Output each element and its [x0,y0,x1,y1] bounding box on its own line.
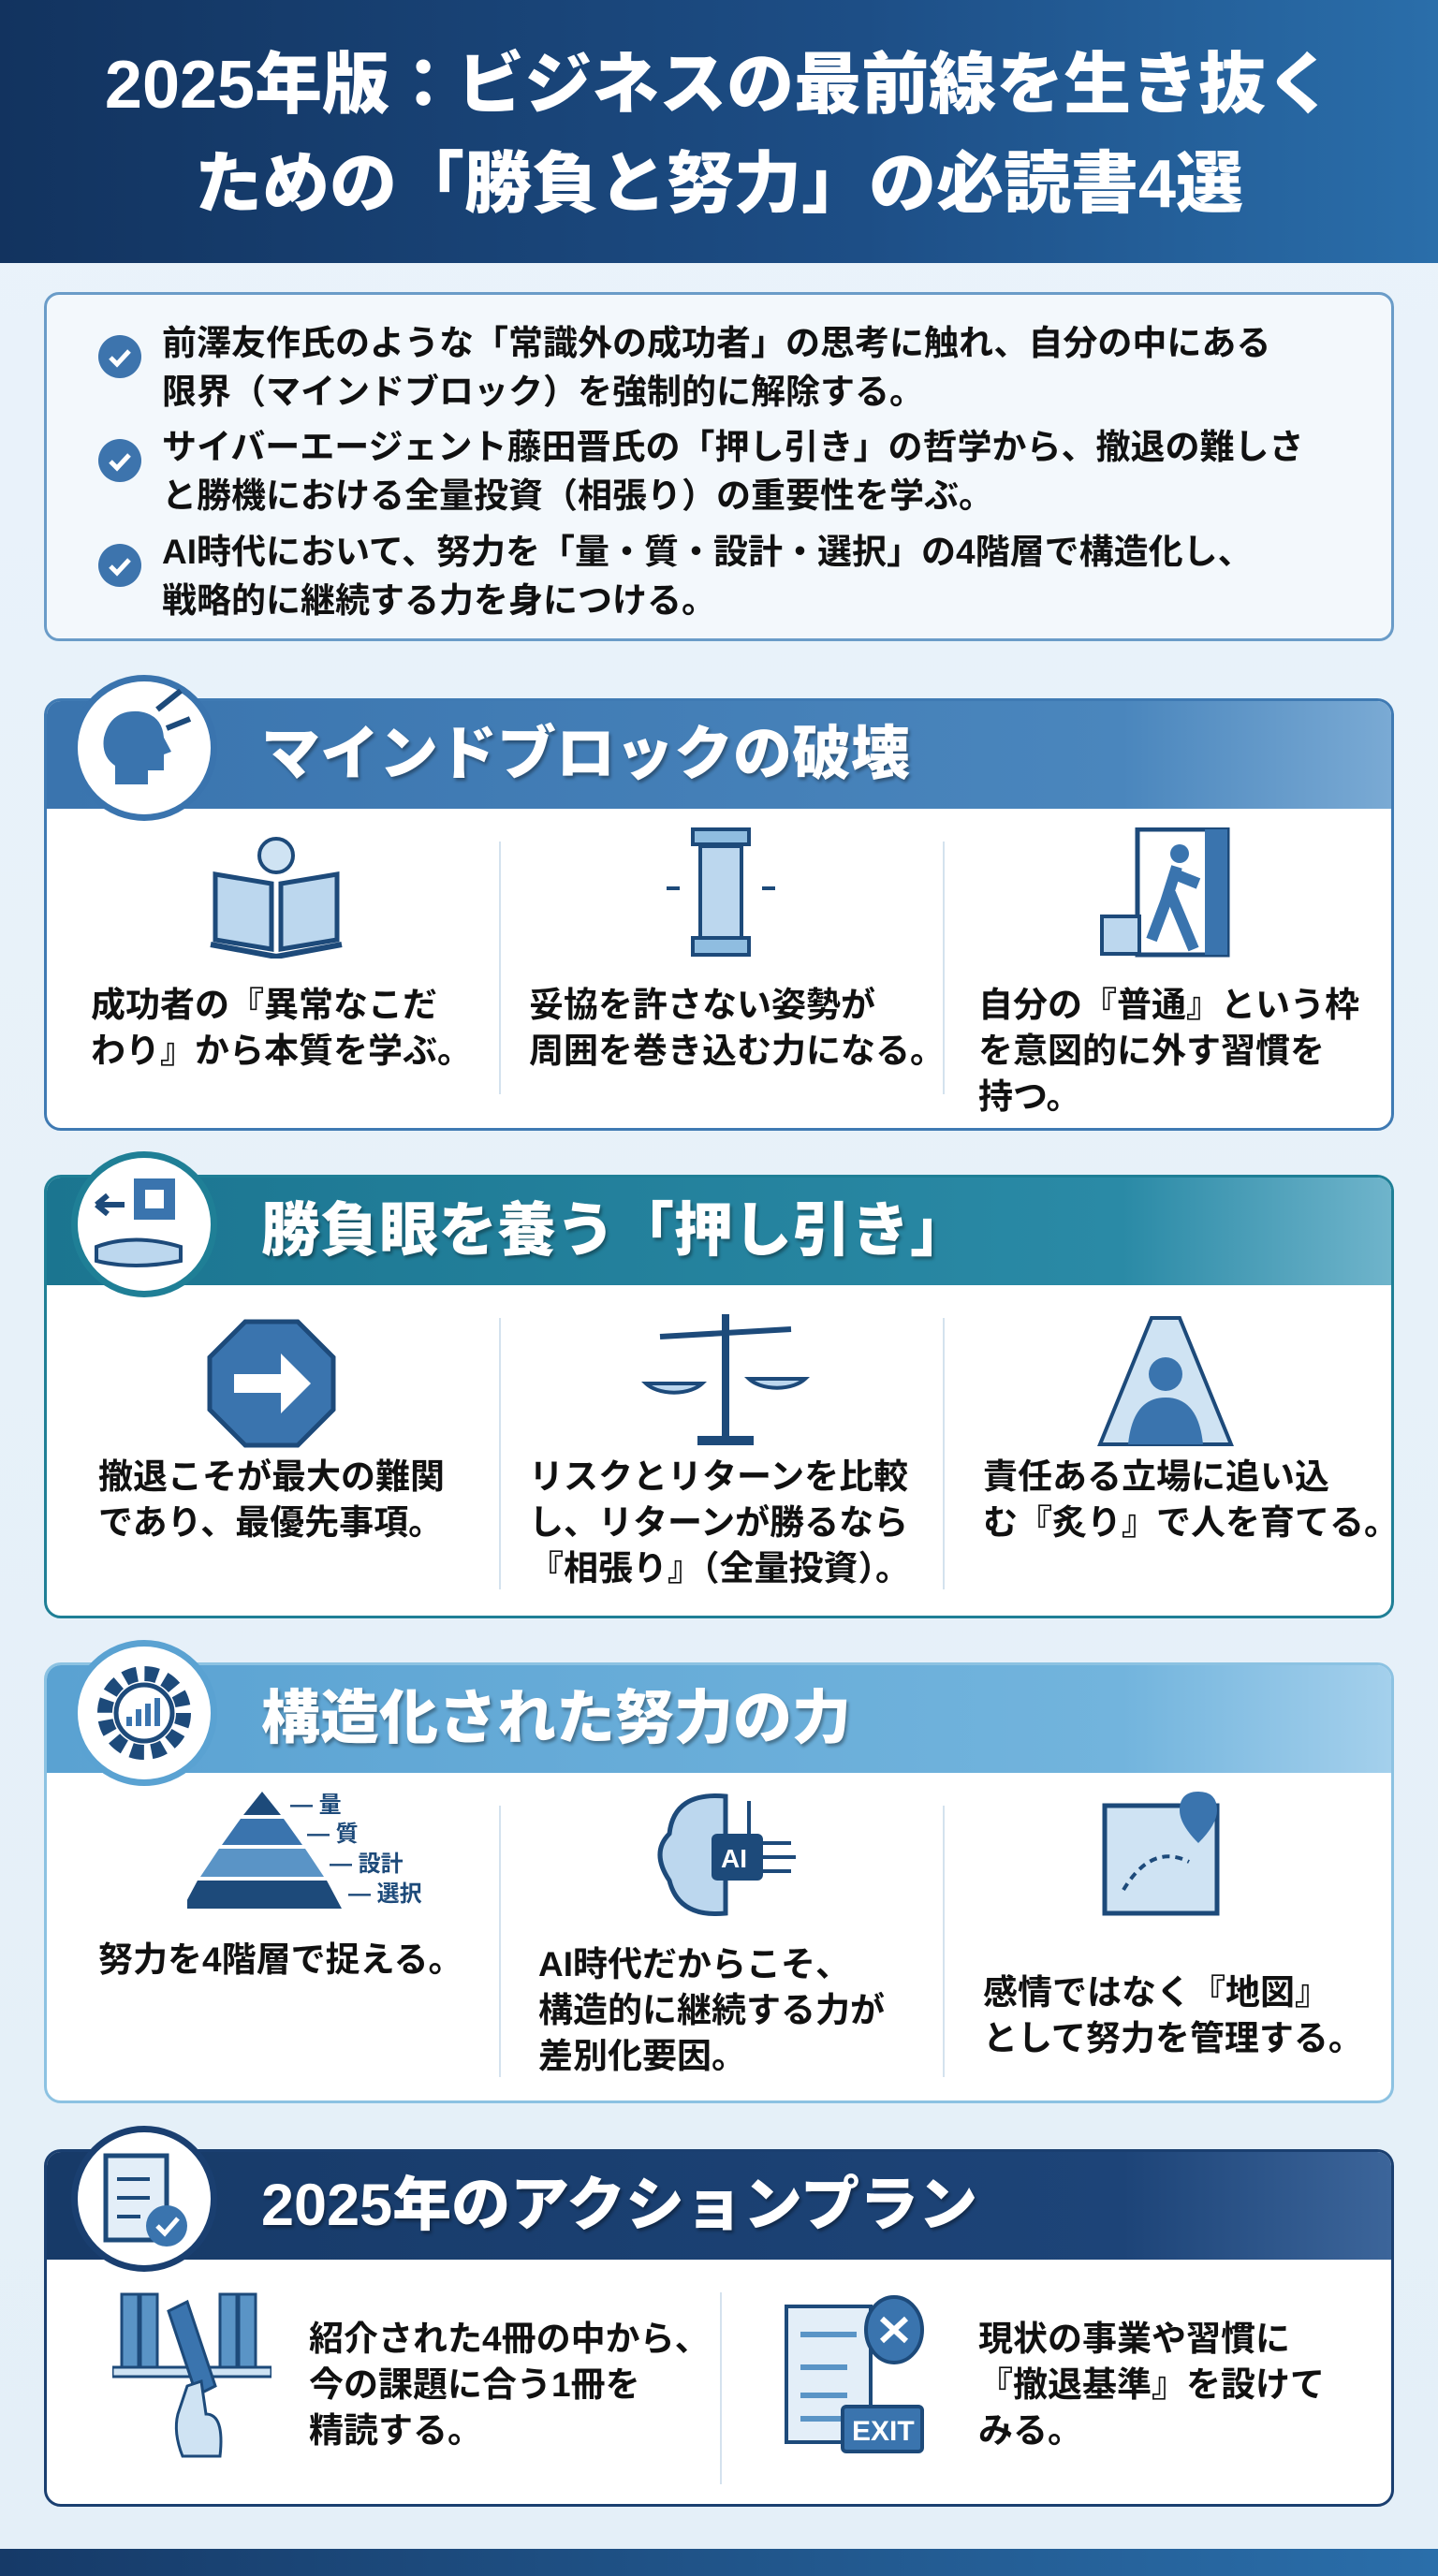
text col 2: 周囲を巻き込む力になる。 [529,1032,945,1070]
icon: AI brain: AI [721,1844,747,1873]
icon: pyramid: — 質 [307,1822,359,1847]
header: 2025年のアクションプラン [261,2173,977,2238]
icon: spotlight person [1097,1316,1234,1446]
icon: book with bulb [210,837,343,959]
header [47,1178,1391,1285]
summary box: 限界（マインドブロック）を強制的に解除する。 [162,373,924,411]
text col 1: わり』から本質を学ぶ。 [91,1032,472,1070]
panel: mind block [44,698,1394,1131]
header [47,701,1391,809]
summary box [44,292,1394,641]
text col 1: 成功者の『異常なこだ [91,986,437,1024]
panel: structured effort [44,1662,1394,2103]
text col 3 [983,1973,1363,2057]
point 2 [98,428,1304,515]
icon: scale [641,1314,810,1445]
title: 2025年版：ビジネスの最前線を生き抜く [105,48,1333,123]
text col 3: む『炙り』で人を育てる。 [983,1503,1394,1542]
icon: exit door [1100,827,1230,957]
text col 2 [538,1945,885,2075]
point 3 [98,533,1253,620]
summary box: と勝機における全量投資（相張り）の重要性を学ぶ。 [162,476,993,515]
text col 1 [98,1457,445,1542]
footer bar [0,2549,1438,2576]
summary box: 戦略的に継続する力を身につける。 [162,581,716,620]
summary box: AI時代において、努力を「量・質・設計・選択」の4階層で構造化し、 [162,533,1253,571]
text col 1: 撤退こそが最大の難関 [98,1457,445,1496]
icon circle: mind [71,675,217,821]
text col 2: 構造的に継続する力が [538,1991,885,2029]
icon: map [1103,1792,1219,1915]
summary box: サイバーエージェント藤田晋氏の「押し引き」の哲学から、撤退の難しさ [162,428,1304,466]
text col 2: 妥協を許さない姿勢が [529,986,875,1024]
text col 1 [91,986,472,1070]
text col 1: 努力を4階層で捉える。 [98,1940,462,1979]
icon: pyramid: — 量 [290,1793,342,1818]
icon: exit document [785,2295,924,2453]
text col 2: 差別化要因。 [538,2037,746,2075]
text col 2 [529,986,945,1070]
text col 3: 自分の『普通』という枠 [978,986,1359,1024]
text col 2: リスクとリターンを比較 [529,1457,908,1496]
text col 2: 現状の事業や習慣に [978,2320,1290,2358]
text col 1: 精読する。 [309,2411,482,2450]
icon circle: hand [71,1151,217,1297]
icon: exit document: EXIT [852,2416,915,2447]
icon circle: clipboard [71,2126,217,2272]
header [47,2152,1391,2260]
icon: pyramid [187,1792,422,1909]
summary box: 前澤友作氏のような「常識外の成功者」の思考に触れ、自分の中にある [162,324,1270,362]
title: ための「勝負と努力」の必読書4選 [195,147,1243,222]
text col 2 [529,1457,910,1588]
icon circle: gear [71,1640,217,1786]
text col 1: であり、最優先事項。 [98,1503,443,1542]
icon: pyramid: — 選択 [348,1881,422,1907]
panel: push and pull [44,1175,1394,1618]
text col 1: 紹介された4冊の中から、 [309,2320,710,2358]
text col 3: を意図的に外す習慣を [978,1032,1325,1070]
text col 2: AI時代だからこそ、 [538,1945,850,1983]
text col 2: し、リターンが勝るなら [529,1503,908,1542]
header [47,1665,1391,1773]
point 1 [98,324,1270,411]
text col 2: 『撤退基準』を設けて [978,2365,1325,2404]
text col 3: 感情ではなく『地図』 [983,1973,1329,2012]
icon: pyramid: — 設計 [330,1852,404,1877]
icon: arrow sign [208,1320,335,1447]
header: 構造化された努力の力 [261,1686,851,1751]
header: マインドブロックの破壊 [261,722,910,787]
icon: AI brain [657,1793,796,1916]
title [0,0,1438,263]
text col 1 [309,2320,710,2450]
text col 3 [983,1457,1394,1542]
icon: pillar [667,827,775,957]
text col 3: 持つ。 [978,1077,1081,1116]
text col 3: 責任ある立場に追い込 [983,1457,1329,1496]
text col 3 [978,986,1359,1116]
text col 2: みる。 [978,2411,1082,2450]
icon: bookshelf with hand [112,2293,271,2458]
text col 3: として努力を管理する。 [983,2019,1363,2057]
text col 1: 今の課題に合う1冊を [309,2365,640,2404]
panel: action plan [44,2149,1394,2507]
header: 勝負眼を養う「押し引き」 [261,1198,969,1264]
text col 2 [978,2320,1325,2450]
text col 2: 『相張り』（全量投資）。 [529,1549,910,1588]
